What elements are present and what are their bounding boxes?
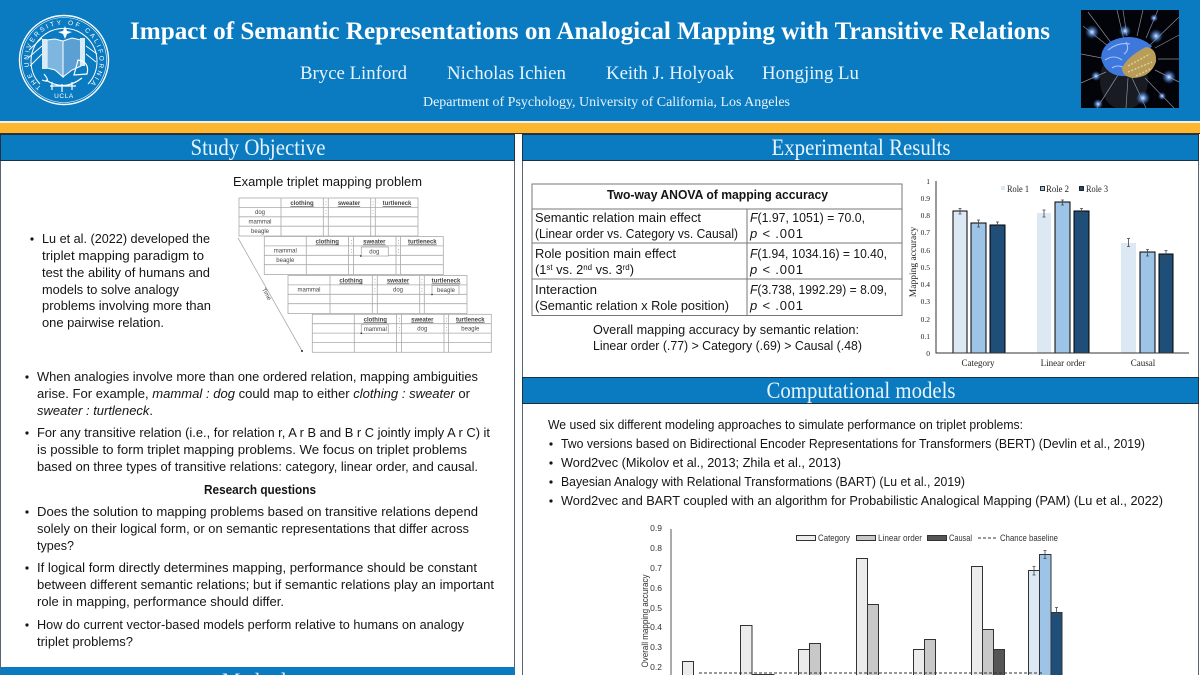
table: ANOVA: Role position main effect bbox=[535, 246, 676, 261]
figure: triplet mapping tables: : bbox=[350, 240, 352, 246]
figure: triplet mapping tables: mammal bbox=[364, 327, 387, 333]
figure: triplet mapping tables: : bbox=[325, 210, 327, 216]
bar chart: mapping accuracy by role: 0.9 bbox=[921, 194, 930, 203]
bar chart: overall mapping accuracy by model: 0.5 bbox=[650, 603, 662, 613]
text: research question 2: between different semantic relations; but if semantic relations play an important bbox=[37, 577, 494, 592]
legend: roles: Role 3 bbox=[1086, 184, 1108, 194]
text: paradigm bullet: triplet mapping paradigm to bbox=[42, 248, 204, 263]
bar chart: mapping accuracy by role: 0.4 bbox=[921, 280, 930, 289]
authors bbox=[300, 63, 859, 84]
text: transitive relation bullet: based on three types of transitive relations: category, linear order, and causal. bbox=[37, 459, 478, 474]
legend: model chart: Category bbox=[818, 533, 850, 543]
table: ANOVA: (Linear order vs. Category vs. Causal) bbox=[535, 226, 738, 241]
text: research question 2 bbox=[25, 560, 494, 609]
figure: triplet mapping tables: : bbox=[398, 326, 400, 332]
figure: triplet mapping tables: : bbox=[325, 201, 327, 207]
icon: UCLA seal: UCLA bbox=[54, 93, 74, 100]
panel: computational models bbox=[522, 378, 1198, 675]
figure: triplet mapping tables: turtleneck bbox=[408, 240, 437, 246]
text: research question 1: solely on their logical form, or on semantic representations that differ across bbox=[37, 521, 469, 536]
table: ANOVA: ) bbox=[630, 262, 634, 277]
bar chart: mapping accuracy by role: 0.1 bbox=[921, 332, 930, 341]
text: research question 2: role in mapping, performance should differ. bbox=[37, 594, 284, 609]
table: ANOVA: p < .001 bbox=[749, 298, 803, 313]
figure: triplet mapping tables: beagle bbox=[276, 258, 295, 264]
text: paradigm bullet: models to solve analogy bbox=[42, 282, 179, 297]
text: research question 3: How do current vector-based models perform relative to humans on analogy bbox=[37, 617, 464, 632]
panel: study objective bbox=[0, 134, 514, 675]
bar chart: mapping accuracy by role: 0.3 bbox=[921, 297, 930, 306]
bar chart: mapping accuracy by role: Linear order bbox=[1041, 358, 1085, 368]
title: Impact of Semantic Representations on Analogical Mapping with Transitive Relations bbox=[130, 18, 1050, 45]
bar chart: mapping accuracy by role bbox=[909, 177, 1189, 368]
heading: study objective: Study Objective bbox=[190, 135, 326, 160]
caption: example triplet problem: Example triplet mapping problem bbox=[233, 174, 422, 189]
bar chart: mapping accuracy by role: 1 bbox=[926, 177, 930, 186]
figure: triplet mapping tables: clothing bbox=[316, 240, 339, 246]
legend: model chart: Causal bbox=[949, 533, 972, 543]
text: ambiguity bullet: When analogies involve more than one ordered relation, mapping ambiguities bbox=[37, 369, 478, 384]
figure: triplet mapping tables: dog bbox=[369, 250, 379, 256]
figure: triplet mapping tables: : bbox=[372, 210, 374, 216]
bar chart: overall mapping accuracy by model bbox=[640, 523, 1062, 675]
authors: Nicholas Ichien bbox=[447, 63, 566, 84]
figure: triplet mapping tables: : bbox=[397, 248, 399, 254]
legend: model chart: Chance baseline bbox=[1000, 533, 1058, 543]
list: modeling approaches: Word2vec and BART coupled with an algorithm for Probabilistic Analogical Mapping (PAM) (Lu et al., 2022) bbox=[561, 493, 1163, 508]
text: research question 1 bbox=[25, 504, 478, 553]
text: overall mapping accuracy bbox=[593, 322, 862, 353]
figure: triplet mapping tables: turtleneck bbox=[456, 317, 485, 323]
figure: triplet mapping tables: : bbox=[374, 288, 376, 294]
list: modeling approaches: Bayesian Analogy with Relational Transformations (BART) (Lu et al., 2019) bbox=[561, 474, 965, 489]
figure: triplet mapping tables bbox=[238, 198, 491, 352]
legend: model chart bbox=[796, 533, 1058, 543]
figure: triplet mapping tables: dog bbox=[393, 288, 403, 294]
figure: triplet mapping tables: sweater bbox=[411, 317, 434, 323]
text: research question 1: types? bbox=[37, 538, 74, 553]
legend: roles: Role 1 bbox=[1007, 184, 1029, 194]
heading: experimental results: Experimental Results bbox=[772, 135, 951, 160]
table: ANOVA: nd bbox=[583, 263, 592, 272]
figure: triplet mapping tables: turtleneck bbox=[383, 201, 412, 207]
text: research question 1: Does the solution to mapping problems based on transitive relations depend bbox=[37, 504, 478, 519]
affiliation: Department of Psychology, University of California, Los Angeles bbox=[423, 95, 790, 110]
table: ANOVA: p < .001 bbox=[749, 262, 803, 277]
text: transitive relation bullet: is possible to form triplet mapping problems. We focus on triplet problems bbox=[37, 442, 467, 457]
bar chart: mapping accuracy by role: 0.5 bbox=[921, 263, 930, 272]
bar chart: overall mapping accuracy by model: 0.7 bbox=[650, 563, 662, 573]
figure: triplet mapping tables: sweater bbox=[387, 278, 410, 284]
figure: triplet mapping tables: clothing bbox=[339, 278, 363, 284]
text: paradigm bullet: test the ability of humans and bbox=[42, 265, 210, 280]
authors: Bryce Linford bbox=[300, 63, 407, 84]
legend: roles: Role 2 bbox=[1046, 184, 1069, 194]
text: overall mapping accuracy: Linear order (.77) > Category (.69) > Causal (.48) bbox=[593, 338, 862, 353]
figure: triplet mapping tables: beagle bbox=[461, 326, 480, 332]
table: ANOVA: F(3.738, 1992.29) = 8.09, bbox=[750, 282, 887, 297]
list: modeling approaches bbox=[549, 436, 1163, 508]
figure: triplet mapping tables: : bbox=[445, 317, 447, 323]
heading: computational models: Computational models bbox=[766, 378, 956, 403]
text: ambiguity bullet bbox=[25, 369, 478, 418]
panel: methods bbox=[0, 667, 514, 675]
table: ANOVA: (Semantic relation x Role position) bbox=[535, 298, 729, 313]
figure: triplet mapping tables: : bbox=[397, 240, 399, 246]
bar chart: overall mapping accuracy by model: 0.2 bbox=[650, 662, 662, 672]
table: ANOVA: (1 bbox=[535, 262, 547, 277]
header banner bbox=[0, 0, 1200, 134]
legend: model chart: Linear order bbox=[878, 533, 922, 543]
figure: triplet mapping tables: dog bbox=[417, 326, 427, 332]
authors: Hongjing Lu bbox=[762, 63, 859, 84]
icon: UCLA seal: THE UNIVERSITY OF CALIFORNIA bbox=[24, 20, 104, 90]
subheading: research questions: Research questions bbox=[204, 482, 316, 497]
figure: triplet mapping tables: : bbox=[398, 317, 400, 323]
table: ANOVA: vs. 3 bbox=[592, 262, 623, 277]
figure: triplet mapping tables: beagle bbox=[251, 229, 270, 235]
bar chart: overall mapping accuracy by model: 0.9 bbox=[650, 523, 662, 533]
bar chart: mapping accuracy by role: 0 bbox=[926, 349, 930, 358]
bar chart: mapping accuracy by role: Category bbox=[962, 358, 995, 368]
bar chart: mapping accuracy by role: 0.7 bbox=[921, 228, 930, 237]
authors: Keith J. Holyoak bbox=[606, 63, 734, 84]
figure: triplet mapping tables: turtleneck bbox=[432, 278, 461, 284]
bar chart: mapping accuracy by role: Causal bbox=[1131, 358, 1156, 368]
bar chart: overall mapping accuracy by model: 0.6 bbox=[650, 583, 662, 593]
figure: triplet mapping tables: : bbox=[372, 201, 374, 207]
table: ANOVA: p < .001 bbox=[749, 226, 803, 241]
bar chart: mapping accuracy by role: Mapping accuracy bbox=[909, 227, 919, 297]
text: research question 3: triplet problems? bbox=[37, 634, 133, 649]
text: transitive relation bullet: For any transitive relation (i.e., for relation r, A r B and B r C jointly imply A r C) it bbox=[37, 425, 490, 440]
text: paradigm bullet: problems involving more than bbox=[42, 298, 211, 313]
table: ANOVA: Interaction bbox=[535, 282, 597, 297]
text: ambiguity bullet: arise. For example, mammal : dog could map to either clothing : sweater or bbox=[37, 386, 471, 401]
figure: triplet mapping tables: sweater bbox=[363, 240, 386, 246]
text: modeling intro: We used six different modeling approaches to simulate performance on triplet problems: bbox=[548, 417, 1023, 432]
table: ANOVA: F(1.97, 1051) = 70.0, bbox=[750, 210, 865, 225]
text: overall mapping accuracy: Overall mapping accuracy by semantic relation: bbox=[593, 322, 859, 337]
table: ANOVA: Two-way ANOVA of mapping accuracy bbox=[607, 187, 829, 202]
figure: triplet mapping tables: mammal bbox=[297, 288, 321, 294]
text: research question 3 bbox=[25, 617, 464, 649]
figure: triplet mapping tables: Time bbox=[260, 287, 272, 302]
figure: triplet mapping tables: dog bbox=[255, 210, 265, 216]
list: modeling approaches: Word2vec (Mikolov et al., 2013; Zhila et al., 2013) bbox=[561, 455, 841, 470]
bar chart: mapping accuracy by role: 0.8 bbox=[921, 211, 930, 220]
table: ANOVA: st bbox=[546, 263, 553, 272]
list: modeling approaches: Two versions based on Bidirectional Encoder Representations for Transformers (BERT) (Devlin et al., 2019) bbox=[561, 436, 1145, 451]
bar chart: mapping accuracy by role: 0.2 bbox=[921, 315, 930, 324]
table: ANOVA: vs. 2 bbox=[553, 262, 583, 277]
figure: triplet mapping tables: clothing bbox=[364, 317, 387, 323]
panel: experimental results bbox=[522, 134, 1198, 378]
figure: triplet mapping tables: : bbox=[421, 288, 423, 294]
figure: triplet mapping tables: mammal bbox=[248, 220, 272, 226]
table: ANOVA: rd bbox=[623, 263, 630, 272]
legend: roles bbox=[1001, 184, 1108, 194]
figure: triplet mapping tables: mammal bbox=[274, 248, 297, 254]
bar chart: mapping accuracy by role: 0.6 bbox=[921, 246, 930, 255]
table: ANOVA: Semantic relation main effect bbox=[535, 210, 701, 225]
figure: triplet mapping tables: : bbox=[421, 278, 423, 284]
figure: triplet mapping tables: clothing bbox=[290, 201, 314, 207]
figure: triplet mapping tables: beagle bbox=[437, 288, 456, 294]
text: paradigm bullet: one pairwise relation. bbox=[42, 315, 164, 330]
text: transitive relation bullet bbox=[25, 425, 490, 474]
bar chart: overall mapping accuracy by model: 0.8 bbox=[650, 543, 662, 553]
icon: UCLA seal bbox=[18, 14, 110, 106]
icon: brain image bbox=[1081, 10, 1179, 111]
bar chart: overall mapping accuracy by model: 0.3 bbox=[650, 642, 662, 652]
bar chart: overall mapping accuracy by model: 0.4 bbox=[650, 622, 662, 632]
bar chart: overall mapping accuracy by model: Overall mapping accuracy bbox=[640, 574, 650, 668]
figure: triplet mapping tables: : bbox=[350, 248, 352, 254]
table: ANOVA: F(1.94, 1034.16) = 10.40, bbox=[750, 246, 887, 261]
text: paradigm bullet: Lu et al. (2022) developed the bbox=[42, 231, 210, 246]
table: ANOVA bbox=[532, 184, 902, 316]
text: ambiguity bullet: sweater : turtleneck. bbox=[37, 403, 153, 418]
figure: triplet mapping tables: : bbox=[374, 278, 376, 284]
text: research question 2: If logical form directly determines mapping, performance should be constant bbox=[37, 560, 477, 575]
figure: triplet mapping tables: sweater bbox=[338, 201, 361, 207]
figure: triplet mapping tables: : bbox=[445, 326, 447, 332]
text: paradigm bullet bbox=[30, 231, 211, 330]
